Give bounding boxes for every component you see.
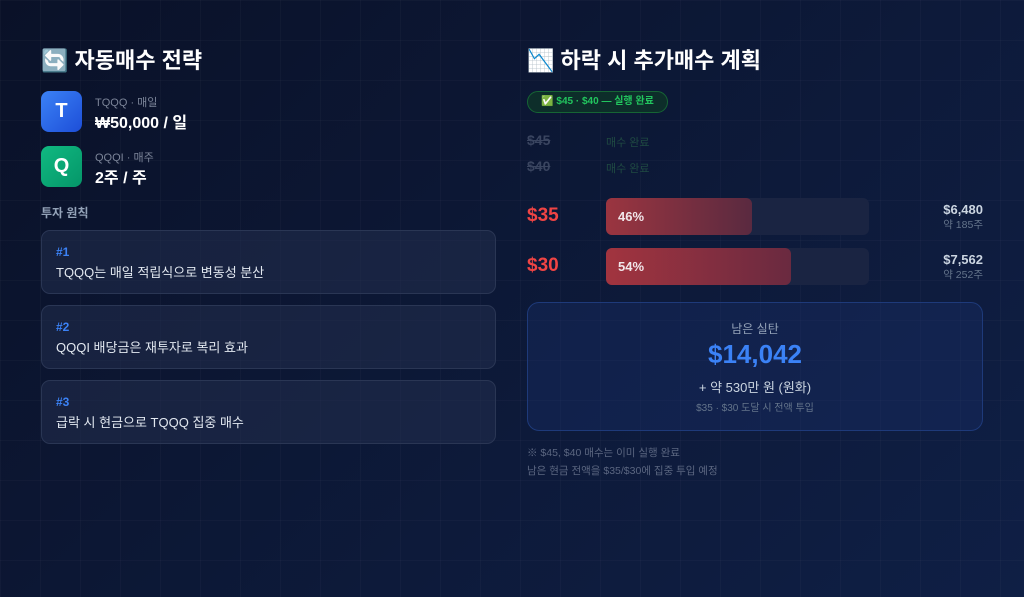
notes: 남은 현금 전액을 $35/$30에 집중 투입 예정 — [527, 465, 718, 477]
done row $40 — [527, 158, 650, 175]
item: TQQQ — [41, 91, 187, 132]
notes: ※ $45, $40 매수는 이미 실행 완료 — [527, 447, 680, 459]
panel: remaining cash: $35 · $30 도달 시 전액 투입 — [696, 403, 814, 414]
value $30: $7,562 — [943, 252, 983, 267]
icon: Q — [41, 146, 82, 187]
card 2: #2 — [56, 320, 69, 334]
card 1: #1 — [56, 245, 69, 259]
item: QQQI — [41, 146, 154, 187]
done row $45: $45 — [527, 132, 550, 148]
icon: T — [41, 91, 82, 132]
bar $35: 46% — [618, 209, 644, 224]
bar $35 — [606, 198, 869, 235]
row $35: $35 — [527, 205, 559, 226]
icon: Q: Q — [54, 155, 69, 177]
panel: remaining cash: + 약 530만 원 (원화) — [699, 380, 811, 395]
item: QQQI: 2주 / 주 — [95, 170, 147, 187]
item: QQQI: QQQI · 매주 — [95, 152, 154, 164]
card 2 — [41, 305, 496, 369]
heading: principles: 투자 원칙 — [41, 206, 88, 220]
badge: executed: ✅ $45 · $40 — 실행 완료 — [541, 96, 654, 107]
value $35 — [943, 202, 983, 231]
card 1: TQQQ는 매일 적립식으로 변동성 분산 — [56, 265, 264, 280]
title: dip buying plan: 📉 하락 시 추가매수 계획 — [527, 48, 761, 73]
card 2: QQQI 배당금은 재투자로 복리 효과 — [56, 340, 248, 355]
panel: remaining cash: 남은 실탄 — [731, 322, 779, 336]
done row $45: 매수 완료 — [606, 137, 650, 149]
bar $30 — [606, 248, 869, 285]
done row $45 — [527, 132, 650, 149]
card 3 — [41, 380, 496, 444]
value $35: 약 185주 — [943, 219, 983, 231]
value $35: $6,480 — [943, 202, 983, 217]
value $30 — [943, 252, 983, 281]
row $30: $30 — [527, 255, 559, 276]
badge: executed — [527, 91, 668, 113]
title: auto buy strategy: 🔄 자동매수 전략 — [41, 48, 202, 73]
icon: T: T — [55, 100, 68, 122]
item: TQQQ: TQQQ · 매일 — [95, 97, 157, 109]
panel: remaining cash — [527, 302, 983, 431]
done row $40: $40 — [527, 158, 550, 174]
value $30: 약 252주 — [943, 269, 983, 281]
card 3: 급락 시 현금으로 TQQQ 집중 매수 — [56, 415, 244, 430]
done row $40: 매수 완료 — [606, 163, 650, 175]
bar $30: 54% — [618, 259, 644, 274]
panel: remaining cash: $14,042 — [708, 339, 802, 369]
card 3: #3 — [56, 395, 69, 409]
notes — [527, 447, 718, 477]
item: TQQQ: ₩50,000 / 일 — [95, 115, 187, 132]
card 1 — [41, 230, 496, 294]
